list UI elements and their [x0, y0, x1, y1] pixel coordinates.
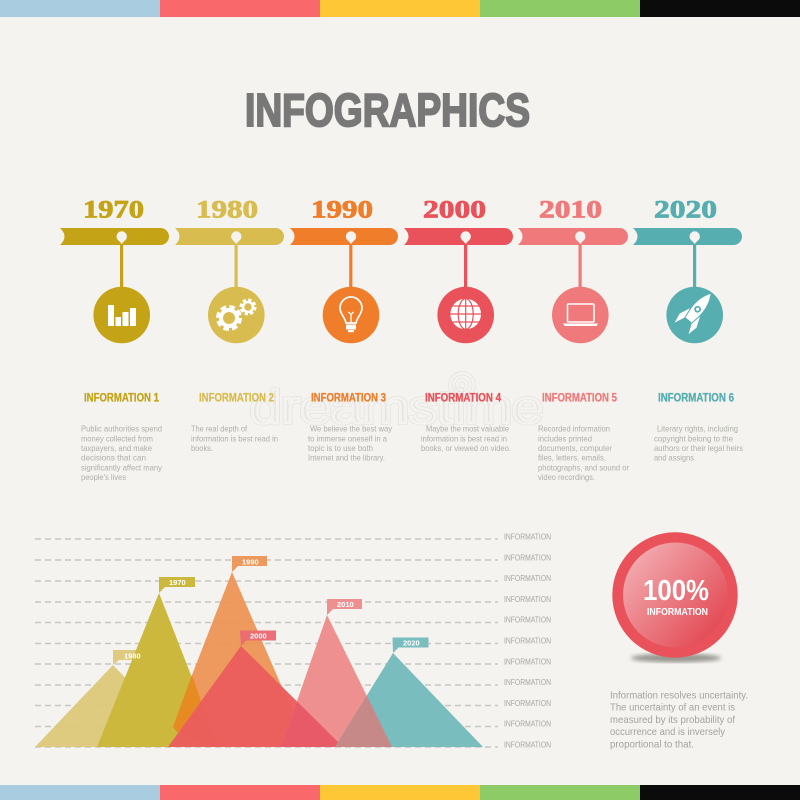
top colour band: [0, 0, 800, 17]
bottom colour band: [0, 785, 800, 800]
axis labels: INFORMATION: [504, 656, 551, 666]
flag labels: 1980: [124, 652, 141, 660]
triangle 2000: [168, 630, 343, 747]
icon: gears: [218, 300, 255, 329]
axis labels: INFORMATION: [504, 636, 551, 646]
information 5: includes printed: [538, 433, 592, 443]
axis labels: INFORMATION: [504, 719, 551, 729]
timeline segment 1980: [175, 228, 284, 343]
description text: proportional to that.: [610, 739, 694, 750]
description text: occurrence and is inversely: [610, 727, 726, 738]
information 6: INFORMATION 6: [658, 390, 734, 404]
information 1: decisions that can: [81, 453, 146, 463]
information 3: Internet and the library.: [308, 453, 385, 463]
flag labels: [124, 558, 420, 660]
triangle 1980: [35, 650, 192, 747]
information 6: [654, 390, 743, 463]
timeline segment 2020: [633, 228, 742, 343]
axis labels: INFORMATION: [504, 594, 551, 604]
year labels: 1980: [196, 196, 258, 224]
information 1: INFORMATION 1: [84, 390, 159, 404]
information 5: files, letters, emails,: [538, 453, 606, 463]
flag labels: 1970: [169, 578, 186, 587]
year labels: 2000: [423, 196, 486, 224]
information 6: authors or their legal heirs: [654, 443, 743, 453]
flag labels: 2000: [250, 632, 267, 640]
flag labels: 2020: [403, 638, 420, 648]
axis labels: INFORMATION: [504, 615, 551, 625]
axis labels: INFORMATION: [504, 677, 551, 687]
axis labels: INFORMATION: [504, 740, 551, 750]
axis labels: INFORMATION: [504, 532, 551, 542]
timeline segment 1990: [290, 228, 398, 343]
information 6: and assigns.: [654, 453, 696, 463]
year labels: 1990: [311, 196, 373, 224]
area chart: [35, 532, 551, 750]
information 1: taxpayers, and make: [81, 443, 152, 453]
information 1: [81, 390, 163, 482]
information 4: information is best read in: [421, 433, 507, 443]
flag labels: 2010: [337, 600, 354, 609]
overlap 2000 and 2010: [281, 701, 343, 747]
information 5: [538, 390, 629, 482]
triangle 2010: [281, 599, 392, 747]
icon: rocket: [673, 287, 719, 335]
100% badge: 100%: [643, 575, 709, 607]
information 3: to immerse oneself in a: [308, 433, 387, 443]
information 5: Recorded information: [538, 424, 610, 434]
description text: The uncertainty of an event is: [610, 703, 735, 714]
year labels: 1970: [83, 196, 144, 224]
information 5: video recordings.: [538, 472, 595, 482]
information 2: The real depth of: [191, 424, 248, 434]
100% badge: [612, 532, 738, 662]
information 2: [191, 390, 278, 453]
100% badge: INFORMATION: [647, 607, 708, 618]
information 6: Literary rights, including: [657, 424, 738, 434]
axis labels: INFORMATION: [504, 698, 551, 708]
icon: laptop: [563, 304, 598, 326]
triangle 1970: [97, 577, 219, 747]
information 4: [421, 390, 511, 453]
information 1: significantly affect many: [81, 462, 163, 472]
information 3: We believe the best way: [310, 424, 393, 434]
information 4: Maybe the most valuable: [426, 424, 509, 434]
year labels: 2020: [654, 196, 717, 224]
timeline: [60, 196, 742, 343]
information 2: INFORMATION 2: [199, 390, 274, 404]
information 4: INFORMATION 4: [425, 390, 501, 404]
information 3: topic is to use both: [308, 443, 373, 453]
information 1: money collected from: [81, 433, 153, 443]
triangle 1990: [173, 556, 308, 747]
overlap 1970 and 1990: [173, 675, 201, 733]
icon: bar chart: [108, 305, 136, 326]
information 1: people's lives: [81, 472, 126, 482]
information 2: books.: [191, 443, 213, 453]
information 3: INFORMATION 3: [311, 390, 386, 404]
description text: Information resolves uncertainty.: [610, 690, 748, 702]
timeline segment 2000: [404, 228, 513, 343]
triangle 2020: [335, 638, 483, 747]
information 5: INFORMATION 5: [542, 390, 617, 404]
watermark: [250, 372, 543, 433]
information 2: information is best read in: [191, 433, 278, 443]
icon: light bulb: [340, 297, 362, 332]
timeline segment 1970: [60, 228, 169, 343]
year labels: [83, 196, 717, 224]
timeline segment 2010: [518, 228, 628, 343]
icon: globe: [450, 299, 481, 329]
year labels: 2010: [539, 196, 602, 224]
axis labels: [504, 532, 551, 750]
axis labels: INFORMATION: [504, 573, 551, 583]
flag labels: 1990: [242, 558, 259, 566]
title: INFOGRAPHICS: [245, 84, 530, 136]
description text: measured by its probability of: [610, 715, 735, 726]
watermark: dreamstime: [250, 381, 543, 433]
information 3: [308, 390, 393, 463]
information 5: documents, computer: [538, 443, 612, 453]
overlap 2010 and 2020: [335, 696, 392, 747]
information 6: copyright belong to the: [654, 433, 733, 443]
watermark: dreamstime: [250, 381, 543, 433]
information 5: photographs, and sound or: [538, 462, 629, 472]
information columns: [81, 390, 743, 482]
information 1: Public authorities spend: [81, 424, 162, 434]
description text: [610, 690, 748, 750]
axis labels: INFORMATION: [504, 552, 551, 562]
information 4: books, or viewed on video.: [421, 443, 511, 453]
